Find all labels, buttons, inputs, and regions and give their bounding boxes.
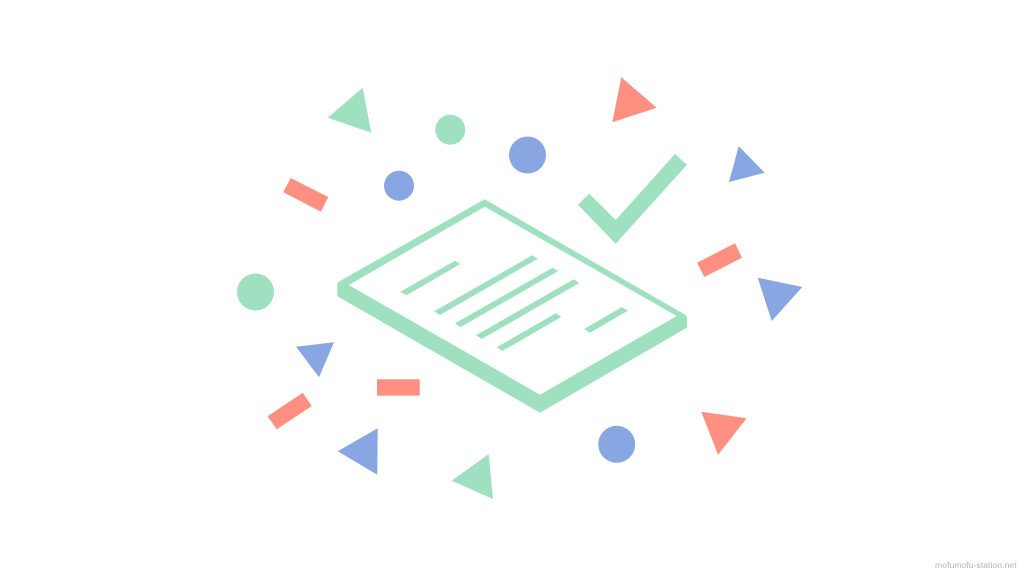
red triangle bottom right <box>701 412 747 455</box>
blue circle left <box>384 171 414 201</box>
green triangle bottom <box>452 454 493 499</box>
icon: check mark <box>578 154 687 244</box>
blue triangle right <box>758 278 802 321</box>
red bar bottom left <box>268 393 312 429</box>
red bar center <box>377 379 420 396</box>
green circle top <box>435 115 465 145</box>
blue triangle bottom left <box>338 428 378 475</box>
blue triangle top right <box>729 146 765 182</box>
icon: isometric document <box>337 199 687 413</box>
blue triangle left <box>296 342 334 377</box>
blue circle top <box>509 136 546 174</box>
confetti shapes <box>237 77 802 499</box>
green triangle top left <box>328 88 371 133</box>
document outline <box>337 199 687 413</box>
document text lines <box>400 255 628 351</box>
watermark: mofumofu-station.net <box>935 560 1017 570</box>
blue circle bottom <box>598 426 635 463</box>
red triangle top <box>612 77 657 122</box>
red bar right <box>697 243 742 277</box>
green circle left <box>237 274 274 310</box>
red bar top left <box>283 178 328 212</box>
